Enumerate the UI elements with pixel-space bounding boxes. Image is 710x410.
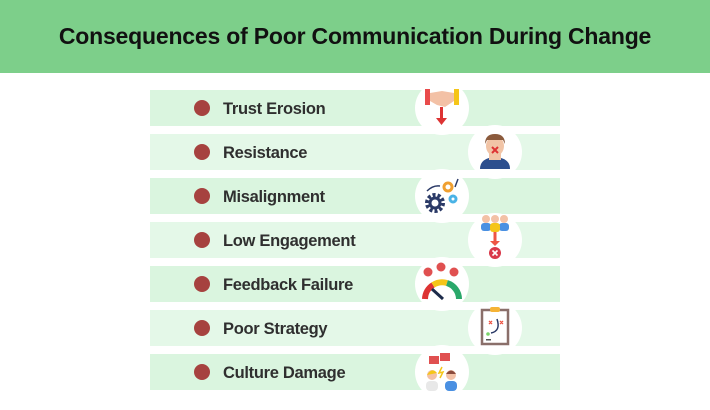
icon: clipboard strategy [468, 301, 522, 355]
row: trust erosion: Trust Erosion [223, 100, 325, 118]
header: Consequences of Poor Communication During Change [59, 23, 651, 49]
row: poor strategy [150, 310, 560, 346]
row: trust erosion [150, 90, 560, 126]
icon: team down [468, 213, 522, 267]
row: culture damage: Culture Damage [223, 364, 345, 382]
icon: silenced person [468, 125, 522, 179]
row: poor strategy: Poor Strategy [223, 320, 327, 338]
row: resistance [150, 134, 560, 170]
row: low engagement: Low Engagement [223, 232, 355, 250]
icon: gauge [415, 257, 469, 311]
icon: handshake down [415, 81, 469, 135]
row: culture damage [150, 354, 560, 390]
row: misalignment: Misalignment [223, 188, 325, 206]
header [0, 0, 710, 73]
row: misalignment [150, 178, 560, 214]
row: low engagement [150, 222, 560, 258]
icon: gears [415, 169, 469, 223]
row: feedback failure: Feedback Failure [223, 276, 353, 294]
row: feedback failure [150, 266, 560, 302]
row: resistance: Resistance [223, 144, 307, 162]
icon: conflict [415, 345, 469, 399]
